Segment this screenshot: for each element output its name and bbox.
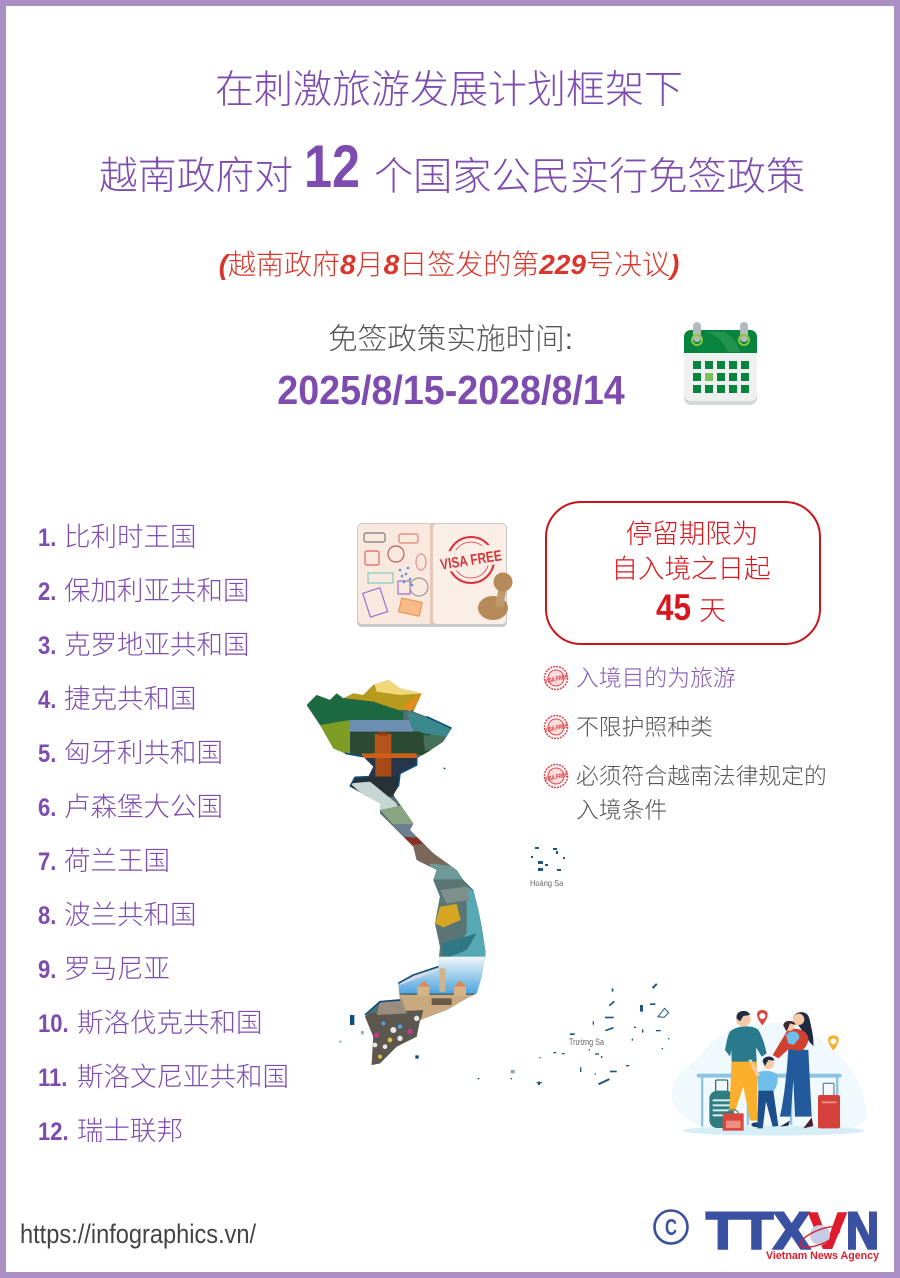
icon: visa free stamp xyxy=(544,666,569,690)
islands: Truong Sa xyxy=(536,983,670,1085)
mother xyxy=(773,1012,813,1128)
bullet 3 xyxy=(544,763,827,823)
title part: lead: 越南政府对 xyxy=(99,155,293,198)
callout line 1: 停留期限为 xyxy=(626,519,758,549)
item 3: 3. xyxy=(38,632,56,660)
boy xyxy=(748,1057,778,1128)
icon: passport with visa free stamp xyxy=(357,523,512,627)
callout line 3: 45 xyxy=(656,587,691,628)
subtitle: resolution: (越南政府8月8日签发的第229号决议) xyxy=(219,249,679,280)
item 7: 7. xyxy=(38,848,56,876)
bullet 2 xyxy=(544,714,713,740)
red suitcase xyxy=(823,1083,834,1097)
TTXVN logo: Vietnam News Agency xyxy=(766,1250,880,1262)
father xyxy=(725,1011,767,1127)
islands: Hoang Sa xyxy=(530,847,565,888)
item 12: 12. xyxy=(38,1118,69,1146)
map of Vietnam with photo collage xyxy=(306,680,540,1085)
item 9: 罗马尼亚 xyxy=(64,954,170,984)
icon: calendar xyxy=(684,322,757,405)
item 10: 10. xyxy=(38,1010,69,1038)
pin: red xyxy=(757,1010,768,1025)
toddler xyxy=(783,1021,799,1045)
callout: stay period xyxy=(545,501,821,645)
item 5: 匈牙利共和国 xyxy=(64,738,223,768)
country list xyxy=(38,522,289,1146)
bullet 1 xyxy=(544,665,736,691)
pin: orange xyxy=(828,1035,839,1051)
icon: visa free stamp xyxy=(544,764,569,788)
item 11: 11. xyxy=(38,1064,67,1092)
icon: visa free stamp xyxy=(544,714,569,740)
period label: 免签政策实施时间: xyxy=(328,323,573,356)
item 3: 克罗地亚共和国 xyxy=(64,630,250,660)
bullet text: 不限护照种类 xyxy=(576,714,713,740)
coastal islets xyxy=(339,768,540,1085)
callout line 3: 天 xyxy=(699,596,726,626)
item 6: 6. xyxy=(38,794,56,822)
item 7: 荷兰王国 xyxy=(64,846,170,876)
bullet text: 入境目的为旅游 xyxy=(576,665,736,691)
item 1: 比利时王国 xyxy=(64,522,196,552)
bullet text: 入境条件 xyxy=(576,797,667,823)
item 6: 卢森堡大公国 xyxy=(64,792,223,822)
callout line 3 xyxy=(656,587,726,628)
period dates: 2025/8/15-2028/8/14 xyxy=(277,367,624,413)
item 2: 保加利亚共和国 xyxy=(64,576,250,606)
bullet text: 必须符合越南法律规定的 xyxy=(576,763,827,789)
item 8: 波兰共和国 xyxy=(64,900,196,930)
item 10: 斯洛伐克共和国 xyxy=(77,1008,262,1038)
bullet text xyxy=(576,763,827,823)
title part: tail: 个国家公民实行免签政策 xyxy=(374,156,805,199)
green suitcase xyxy=(709,1080,734,1128)
TTXVN logo xyxy=(705,1205,880,1262)
title part: number 12: 12 xyxy=(304,133,360,200)
item 12: 瑞士联邦 xyxy=(77,1116,183,1146)
title line 1: 在刺激旅游发展计划框架下 xyxy=(215,69,683,112)
copyright logo xyxy=(653,1209,689,1245)
label: Truong Sa: Trường Sa xyxy=(569,1037,604,1047)
source url: https://infographics.vn/ xyxy=(20,1219,256,1249)
item 4: 捷克共和国 xyxy=(64,684,196,714)
copyright logo: C xyxy=(665,1214,677,1240)
coast edges xyxy=(345,717,452,1015)
title line 2 xyxy=(99,133,805,200)
stamp text: VISA FREE xyxy=(439,547,503,574)
label: Hoang Sa: Hoàng Sa xyxy=(530,878,563,888)
item 8: 8. xyxy=(38,902,56,930)
item 2: 2. xyxy=(38,578,56,606)
callout line 2: 自入境之日起 xyxy=(612,554,770,584)
item 11: 斯洛文尼亚共和国 xyxy=(77,1062,289,1092)
item 5: 5. xyxy=(38,740,56,768)
red bag xyxy=(723,1113,744,1131)
item 9: 9. xyxy=(38,956,56,984)
item 1: 1. xyxy=(38,524,56,552)
sky and terraces xyxy=(306,680,422,710)
item 4: 4. xyxy=(38,686,56,714)
